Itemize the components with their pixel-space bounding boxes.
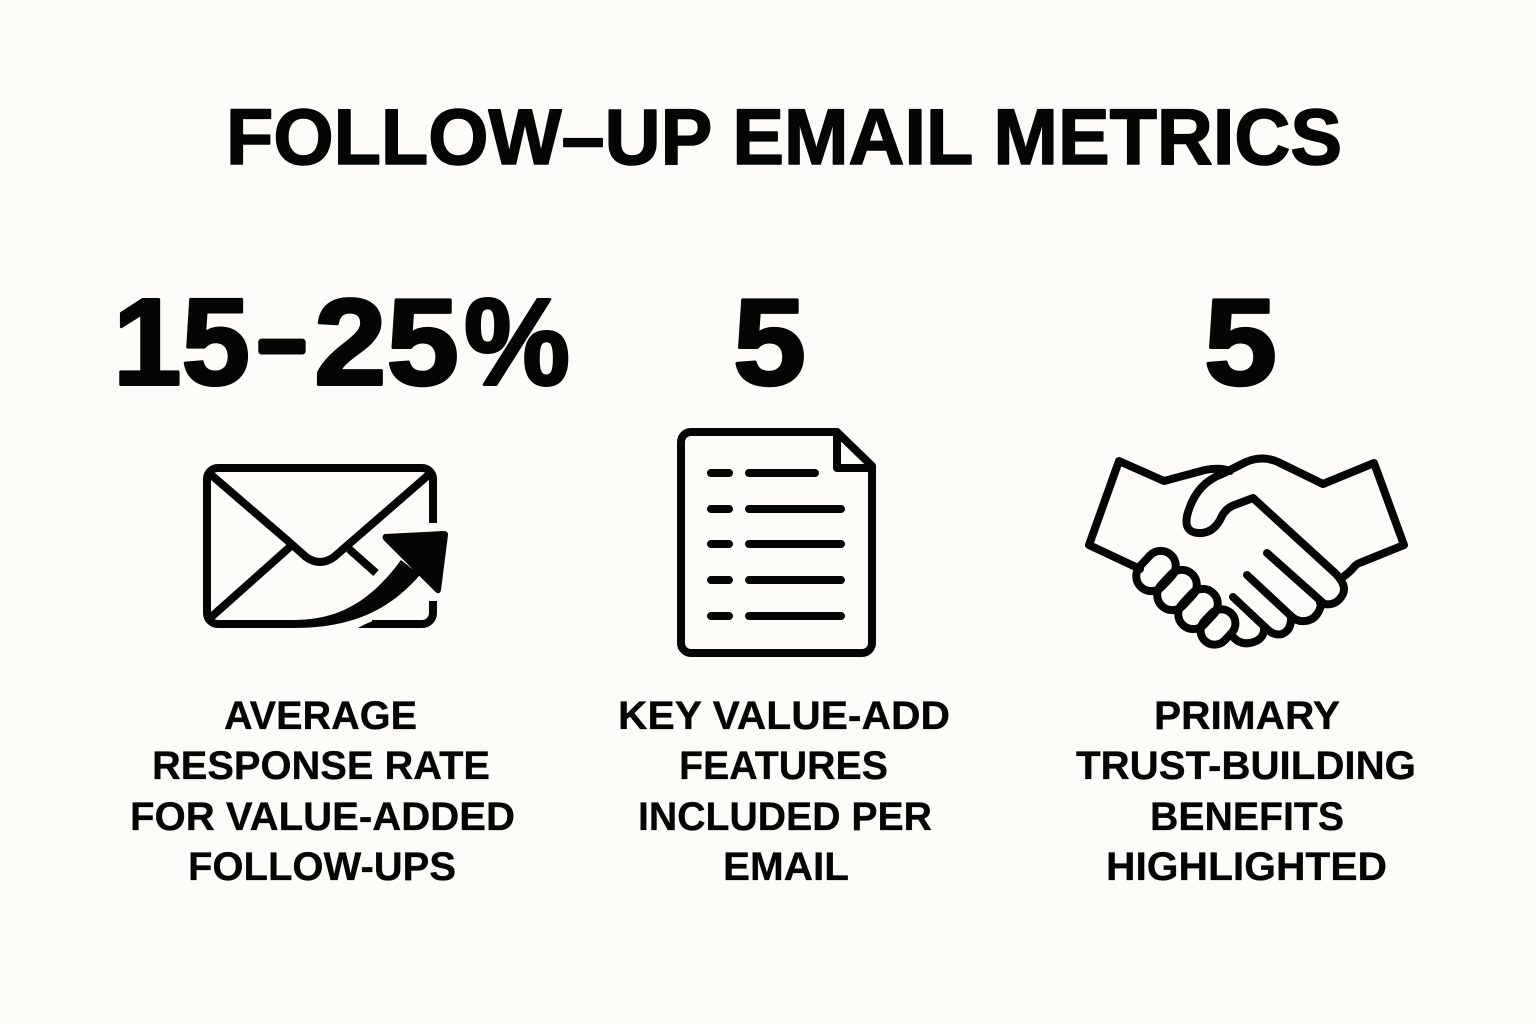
panel: value-add features — [618, 274, 950, 889]
metric value: 5: 5 — [1204, 274, 1277, 412]
metric description: HIGHLIGHTED — [1106, 845, 1387, 889]
metric description: RESPONSE RATE — [152, 744, 490, 788]
metric value: 15–25%: – — [259, 290, 305, 390]
title: FOLLOW–UP EMAIL METRICS — [226, 92, 1342, 181]
metric description — [1076, 694, 1416, 889]
icon: envelope with rising arrow — [207, 468, 447, 628]
metric description: FEATURES — [679, 744, 888, 788]
metric description: PRIMARY — [1154, 694, 1340, 738]
metric description — [618, 694, 950, 889]
panel: trust-building benefits — [1076, 274, 1416, 889]
metric description: INCLUDED PER — [638, 795, 932, 839]
metric description: EMAIL — [723, 845, 849, 889]
metric description: AVERAGE — [224, 694, 417, 738]
metric description: FOR VALUE-ADDED — [130, 795, 515, 839]
icon: document with list — [681, 432, 872, 653]
metric description: BENEFITS — [1150, 795, 1344, 839]
metric value: 15–25%: % — [464, 274, 570, 412]
metric description: TRUST-BUILDING — [1076, 744, 1416, 788]
metric description: KEY VALUE-ADD — [618, 694, 950, 738]
metric value: 15–25%: 25 — [314, 274, 459, 412]
icon: handshake — [1089, 458, 1404, 650]
metric value: 5: 5 — [733, 274, 806, 412]
metric value: 15–25%: 15 — [113, 274, 250, 412]
panel: response rate — [113, 274, 570, 889]
metric description — [130, 694, 515, 889]
metric description: FOLLOW-UPS — [188, 845, 456, 889]
